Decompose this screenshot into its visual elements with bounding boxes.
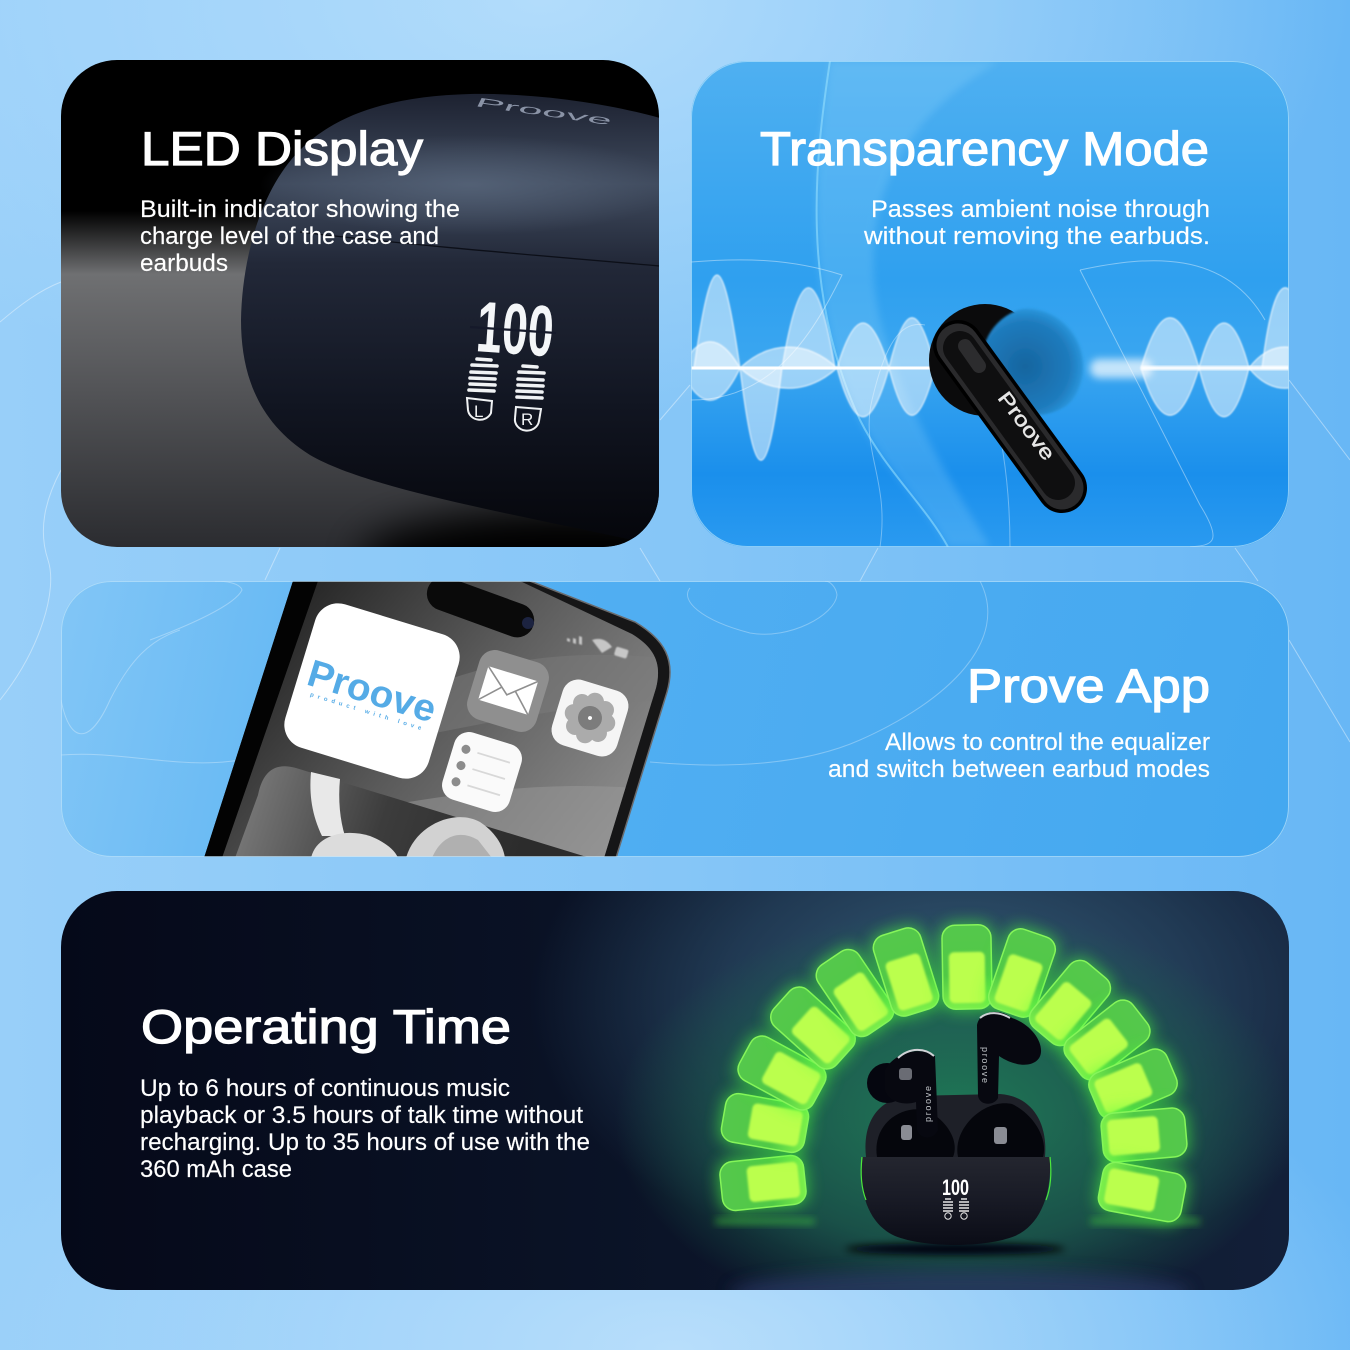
ear illustration bbox=[691, 61, 1265, 547]
status bar bbox=[567, 636, 629, 659]
app icon: photos bbox=[552, 680, 628, 756]
panel: Transparency Mode bbox=[680, 61, 1320, 547]
floor glow bbox=[715, 1219, 1200, 1224]
charging case with earbuds bbox=[845, 1012, 1065, 1255]
product photo: charging case bbox=[241, 94, 659, 547]
right earbud bbox=[977, 1012, 1041, 1104]
panel: LED Display bbox=[61, 60, 659, 547]
panel: Operating Time bbox=[61, 891, 1289, 1290]
text: transparency description: Passes ambient noise through bbox=[871, 196, 1210, 223]
text: operating time description: Up to 6 hours of continuous music bbox=[140, 1075, 510, 1102]
text: operating time description: recharging. Up to 35 hours of use with the bbox=[140, 1129, 590, 1156]
dynamic island bbox=[426, 581, 534, 638]
earbud logo: Proove bbox=[993, 388, 1059, 465]
app tile: Proove bbox=[284, 603, 460, 779]
text: LED description: charge level of the case and bbox=[140, 223, 439, 250]
battery arc bbox=[716, 922, 1190, 1227]
text: app description: and switch between earbud modes bbox=[828, 756, 1210, 783]
LED digits bbox=[478, 302, 552, 356]
heading: Operating Time: Operating Time bbox=[141, 1000, 511, 1053]
text: LED description: Built-in indicator showing the bbox=[140, 196, 460, 223]
right earbud: proove bbox=[980, 1047, 990, 1083]
text: LED description bbox=[140, 196, 460, 277]
text: app description: Allows to control the equalizer bbox=[885, 729, 1210, 756]
left earbud bbox=[867, 1048, 938, 1122]
case logo: Proove bbox=[473, 95, 615, 128]
left earbud: proove bbox=[923, 1086, 933, 1122]
LED digits: 100 bbox=[474, 287, 556, 372]
heading: Transparency Mode: Transparency Mode bbox=[760, 122, 1209, 175]
battery indicators L and R: L bbox=[474, 402, 483, 421]
panel: Prove App bbox=[61, 572, 1289, 865]
earbud bbox=[929, 304, 1090, 488]
text: operating time description: 360 mAh case bbox=[140, 1156, 292, 1183]
text: LED description: earbuds bbox=[140, 250, 228, 277]
phone bbox=[200, 572, 680, 865]
text: operating time description bbox=[140, 1075, 590, 1183]
text: app description bbox=[828, 729, 1210, 783]
battery indicators L and R bbox=[467, 359, 544, 431]
battery indicators L and R: R bbox=[521, 410, 533, 429]
case LED readout: 100 bbox=[942, 1175, 969, 1200]
heading: Prove App: Prove App bbox=[967, 659, 1210, 712]
app tile: Proove: product with love bbox=[309, 692, 423, 732]
text: transparency description: without removing the earbuds. bbox=[863, 223, 1210, 250]
heading: LED Display: LED Display bbox=[141, 122, 424, 175]
text: operating time description: playback or 3.5 hours of talk time without bbox=[140, 1102, 583, 1129]
case battery indicators bbox=[943, 1199, 969, 1219]
sound wave bbox=[680, 275, 1320, 460]
music widget with headphones bbox=[235, 766, 590, 858]
text: transparency description bbox=[863, 196, 1210, 250]
app icon: reminders bbox=[442, 732, 522, 812]
app icon: mail bbox=[467, 650, 549, 732]
app tile: Proove: Proove bbox=[302, 653, 441, 731]
